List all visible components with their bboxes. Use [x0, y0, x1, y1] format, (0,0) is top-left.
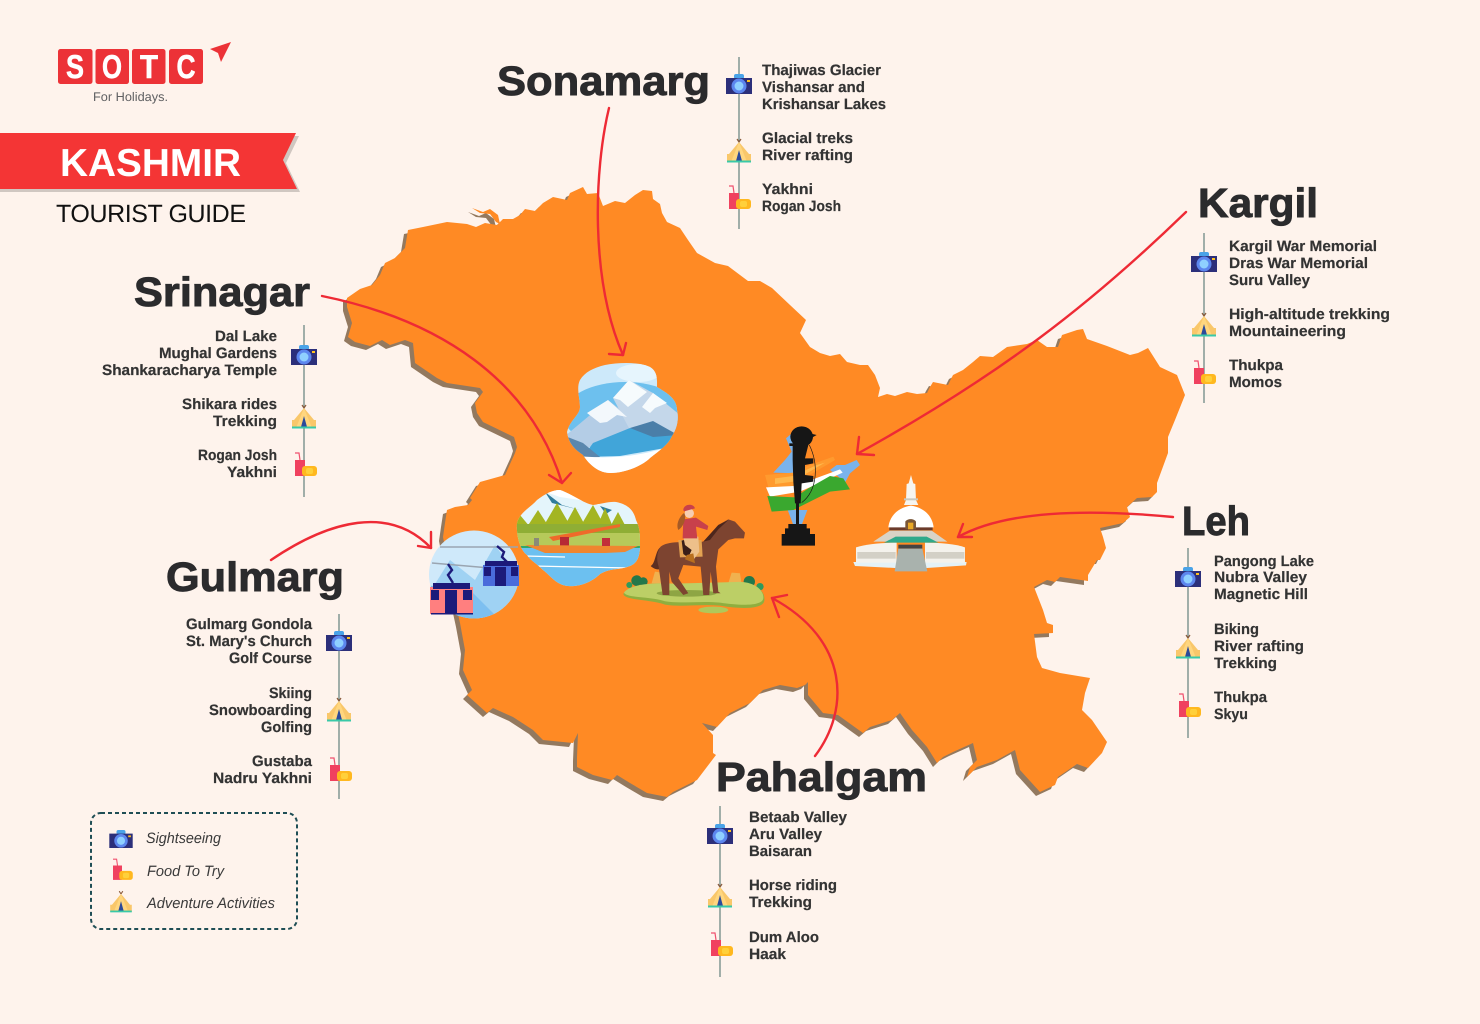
title banner: KASHMIR — [0, 133, 300, 192]
map of Kashmir — [343, 187, 1185, 801]
text: Leh sights: Pangong Lake — [1214, 553, 1314, 570]
text: Gulmarg activities: Snowboarding — [209, 702, 312, 719]
text: Kargil food: Momos — [1229, 374, 1282, 391]
text: Srinagar activities: Trekking — [213, 413, 277, 430]
timeline: Srinagar — [303, 325, 305, 497]
text: Sonamarg sights — [762, 62, 886, 113]
timeline: Sonamarg — [738, 57, 740, 229]
panel: Srinagar — [102, 269, 317, 497]
icon: food — [729, 186, 751, 209]
text: Kargil activities: High-altitude trekking — [1229, 306, 1390, 323]
text: Leh food: Skyu — [1214, 706, 1248, 723]
text: Leh food: Thukpa — [1214, 689, 1268, 706]
timeline: Pahalgam — [719, 806, 721, 977]
text: Leh activities — [1214, 621, 1304, 672]
text: Leh sights — [1214, 553, 1314, 603]
text: Kargil sights: Suru Valley — [1229, 272, 1311, 289]
text: Srinagar activities: Shikara rides — [182, 396, 277, 413]
logo: SOTC For Holidays: T — [140, 48, 158, 85]
legend label: Adventure Activities: Adventure Activities — [146, 895, 275, 912]
illustration: shikara boat on Dal Lake, Srinagar — [516, 490, 640, 586]
logo: SOTC For Holidays: O — [102, 48, 122, 85]
illustration: Shanti Stupa, Leh — [853, 475, 967, 571]
icon: food — [330, 758, 352, 781]
icon: adventure tent — [327, 698, 351, 722]
heading: Kargil: Kargil — [1198, 180, 1318, 226]
subtitle: tourist guide: TOURIST GUIDE — [56, 200, 246, 228]
title banner: KASHMIR: KASHMIR — [60, 142, 241, 185]
text: Sonamarg activities — [762, 130, 853, 164]
text: Pahalgam food: Haak — [749, 946, 787, 963]
text: Leh sights: Magnetic Hill — [1214, 586, 1308, 603]
text: Gulmarg sights — [186, 616, 313, 667]
heading: Sonamarg: Sonamarg — [497, 58, 710, 104]
text: Leh activities: Trekking — [1214, 655, 1277, 672]
arrow: Pahalgam — [772, 595, 837, 756]
text: Sonamarg food — [762, 181, 841, 215]
text: Srinagar sights — [102, 328, 277, 379]
text: Leh activities: Biking — [1214, 621, 1259, 638]
text: Kargil food: Thukpa — [1229, 357, 1284, 374]
panel: legend — [91, 813, 297, 929]
logo: SOTC For Holidays — [58, 42, 231, 104]
text: Pahalgam sights — [749, 809, 848, 860]
text: Kargil food — [1229, 357, 1284, 391]
text: Pahalgam food: Dum Aloo — [749, 929, 819, 946]
text: Leh sights: Nubra Valley — [1214, 569, 1308, 586]
icon: food — [1179, 694, 1201, 717]
panel: Pahalgam — [707, 754, 927, 977]
heading: Srinagar: Srinagar — [134, 269, 310, 315]
text: Pahalgam activities: Trekking — [749, 894, 812, 911]
heading: Pahalgam: Pahalgam — [716, 754, 927, 800]
text: Sonamarg activities: River rafting — [762, 147, 853, 164]
text: Sonamarg food: Rogan Josh — [762, 198, 841, 215]
text: Srinagar food — [198, 447, 277, 481]
icon: adventure tent — [727, 139, 751, 162]
text: Pahalgam activities: Horse riding — [749, 877, 837, 894]
text: Gulmarg activities — [209, 685, 312, 736]
arrow: Kargil — [857, 212, 1186, 455]
arrow: Gulmarg — [271, 522, 431, 560]
arrow: Srinagar — [322, 296, 571, 483]
arrow: Leh — [958, 513, 1173, 537]
text: Kargil sights: Kargil War Memorial — [1229, 238, 1377, 255]
panel: Sonamarg — [497, 57, 886, 229]
text: Kargil activities — [1229, 306, 1390, 340]
text: Srinagar sights: Dal Lake — [215, 328, 277, 345]
text: Gulmarg sights: St. Mary's Church — [186, 633, 312, 650]
text: Gulmarg food: Gustaba — [252, 753, 313, 770]
legend label: Sightseeing: Sightseeing — [146, 830, 222, 847]
text: Gulmarg food: Nadru Yakhni — [213, 770, 312, 787]
icon: food — [295, 453, 317, 476]
text: Sonamarg sights: Thajiwas Glacier — [762, 62, 881, 79]
text: Kargil sights: Dras War Memorial — [1229, 255, 1368, 272]
text: Gulmarg sights: Gulmarg Gondola — [186, 616, 313, 633]
icon: legend food — [113, 859, 133, 880]
icon: adventure tent — [1192, 313, 1216, 336]
icon: sightseeing camera — [726, 74, 752, 94]
icon: sightseeing camera — [291, 345, 317, 365]
text: Pahalgam activities — [749, 877, 837, 911]
text: Leh activities: River rafting — [1214, 638, 1304, 655]
legend label: Food To Try: Food To Try — [147, 863, 225, 880]
text: Kargil sights — [1229, 238, 1377, 289]
text: Sonamarg food: Yakhni — [762, 181, 813, 198]
panel: Kargil — [1191, 180, 1390, 403]
text: Pahalgam sights: Betaab Valley — [749, 809, 848, 826]
icon: sightseeing camera — [1191, 252, 1217, 272]
icon: sightseeing camera — [326, 631, 352, 651]
text: Gulmarg sights: Golf Course — [229, 650, 312, 667]
heading: Gulmarg: Gulmarg — [166, 554, 344, 600]
text: Pahalgam sights: Baisaran — [749, 843, 812, 860]
text: Leh food — [1214, 689, 1268, 723]
text: Srinagar sights: Shankaracharya Temple — [102, 362, 277, 379]
text: Gulmarg activities: Skiing — [269, 685, 312, 702]
text: Gulmarg food — [213, 753, 313, 787]
text: Gulmarg activities: Golfing — [261, 719, 312, 736]
timeline: Gulmarg — [338, 614, 340, 799]
illustration: gondola cable cars, Gulmarg — [429, 530, 519, 618]
text: Pahalgam sights: Aru Valley — [749, 826, 823, 843]
icon: sightseeing camera — [707, 824, 733, 844]
text: Kargil activities: Mountaineering — [1229, 323, 1346, 340]
icon: legend tent — [110, 891, 132, 912]
text: Srinagar food: Rogan Josh — [198, 447, 277, 464]
icon: legend camera — [109, 830, 133, 848]
icon: food — [1194, 361, 1216, 384]
icon: adventure tent — [1176, 635, 1200, 658]
icon: food — [711, 933, 733, 956]
text: Srinagar food: Yakhni — [227, 464, 277, 481]
illustration: snowy mountains, Sonamarg — [567, 363, 678, 473]
illustration: horse rider, Pahalgam — [623, 505, 764, 613]
panel: Leh — [1175, 498, 1314, 738]
icon: adventure tent — [708, 884, 732, 908]
logo: SOTC For Holidays: C — [176, 48, 196, 85]
text: Srinagar sights: Mughal Gardens — [159, 345, 277, 362]
text: Pahalgam food — [749, 929, 819, 963]
text: Srinagar activities — [182, 396, 277, 430]
text: Sonamarg sights: Krishansar Lakes — [762, 96, 886, 113]
illustration: Battlefield Cross war memorial over India flag, Kargil — [765, 426, 860, 546]
arrow: Sonamarg — [598, 108, 626, 355]
timeline: Kargil — [1203, 233, 1205, 403]
text: Sonamarg activities: Glacial treks — [762, 130, 853, 147]
panel: Gulmarg — [166, 554, 352, 799]
logo: SOTC For Holidays: S — [66, 48, 84, 85]
icon: sightseeing camera — [1175, 567, 1201, 587]
logo: SOTC For Holidays: For Holidays. — [93, 90, 168, 104]
icon: adventure tent — [292, 405, 316, 428]
text: Sonamarg sights: Vishansar and — [762, 79, 865, 96]
heading: Leh: Leh — [1182, 498, 1250, 544]
timeline: Leh — [1187, 548, 1189, 738]
